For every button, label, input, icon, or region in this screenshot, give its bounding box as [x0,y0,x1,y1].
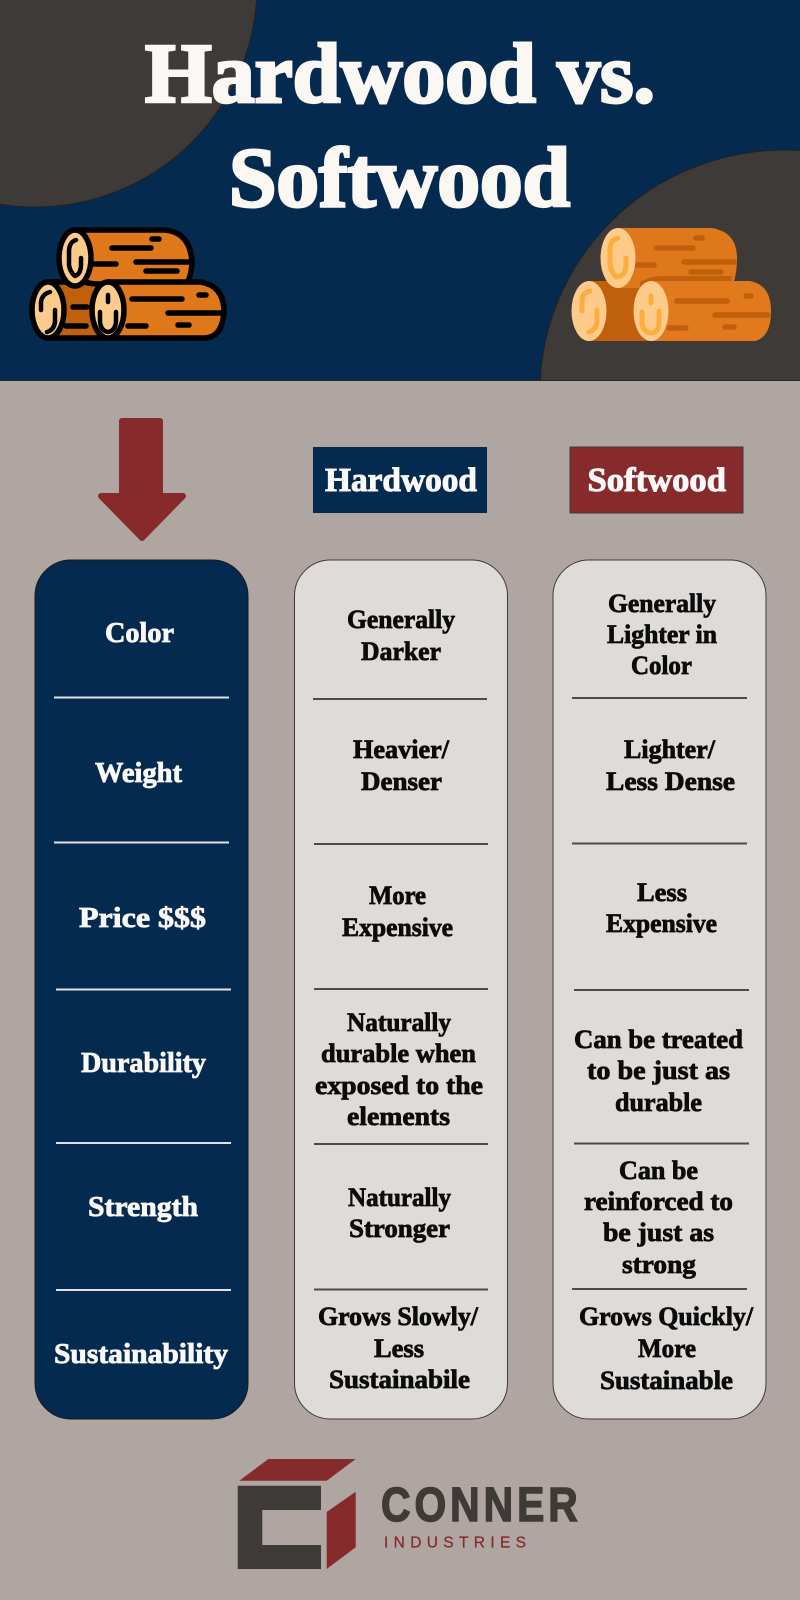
heading: hardwood: Hardwood [325,462,477,499]
panel: hardwood values: Stronger [349,1214,450,1243]
panel: hardwood values: Sustainabile [329,1365,470,1394]
main background [0,380,800,1600]
icon: hardwood logs [32,230,224,338]
panel: hardwood values: durable when [321,1039,477,1068]
decorative corner shape: top left [0,0,257,207]
panel: hardwood values: elements [347,1102,450,1131]
panel: softwood values: Less [637,878,687,907]
heading: hardwood [313,447,487,513]
panel: softwood values: Sustainable [600,1366,733,1395]
panel: softwood values [553,560,766,1419]
panel: hardwood values: Heavier/ [353,735,450,764]
panel: categories: Price $$$ [79,903,206,934]
panel: categories: Strength [88,1192,198,1223]
panel: categories: Sustainability [54,1339,228,1370]
panel: softwood values: Can be [619,1156,698,1185]
panel: softwood values: Expensive [606,909,717,938]
panel: categories [35,560,248,1419]
title: Hardwood vs. [145,27,655,121]
panel: softwood values: strong [622,1250,696,1279]
panel: hardwood values [294,560,508,1419]
panel: hardwood values: Naturally [347,1008,451,1037]
title [145,27,655,225]
panel: softwood values: to be just as [587,1056,730,1085]
panel: hardwood values: Denser [361,767,442,796]
panel: categories: Color [105,618,174,649]
panel: categories: Durability [81,1048,206,1079]
panel: softwood values: Can be treated [574,1025,744,1054]
panel: softwood values: Lighter/ [624,735,716,764]
panel: softwood values: Lighter in [607,620,718,649]
arrow pointing down [101,421,183,538]
header band [0,0,800,634]
heading: softwood: Softwood [588,462,726,499]
icon: softwood logs [572,228,771,341]
heading: softwood [570,447,743,513]
panel: softwood values: be just as [603,1218,714,1247]
panel: softwood values: Generally [608,589,716,618]
panel: hardwood values: Naturally [348,1183,451,1212]
panel: softwood values: Grows Quickly/ [579,1302,754,1331]
panel: hardwood values: Expensive [342,913,453,942]
title: Softwood [229,131,570,225]
panel: hardwood values: exposed to the [315,1071,483,1100]
panel: categories: Weight [95,758,183,789]
panel: hardwood values: Less [374,1334,424,1363]
logo wordmark: CONNER [381,1479,582,1532]
panel: hardwood values: Darker [361,637,441,666]
panel: hardwood values: More [369,881,426,910]
panel: softwood values: durable [615,1088,702,1117]
panel: softwood values: Color [631,651,692,680]
panel: hardwood values: Grows Slowly/ [318,1302,479,1331]
panel: softwood values: reinforced to [584,1187,733,1216]
logo mark [238,1459,356,1569]
panel: softwood values: Less Dense [606,767,735,796]
panel: hardwood values: Generally [347,605,455,634]
panel: softwood values: More [638,1334,696,1363]
logo: Conner Industries [238,1459,582,1569]
decorative corner shape: bottom right [540,150,800,634]
logo wordmark: INDUSTRIES [384,1535,531,1552]
